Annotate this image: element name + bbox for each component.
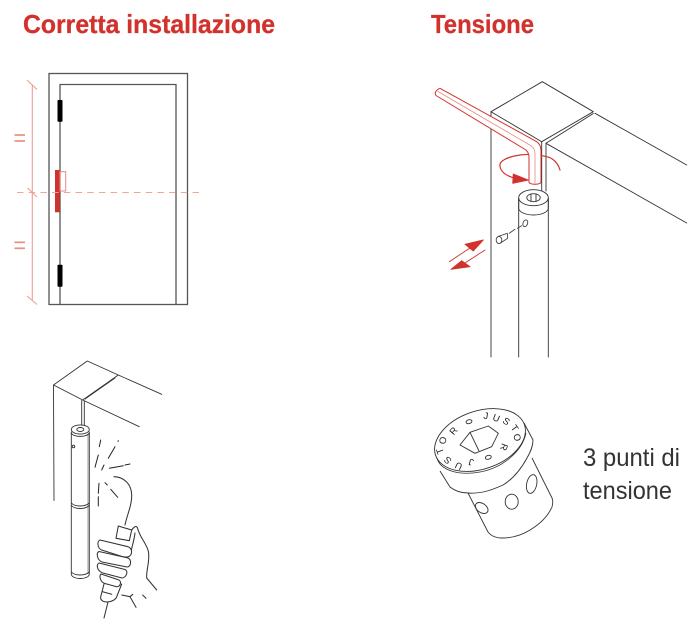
hex socket [460, 426, 498, 453]
lettering on cap: T [434, 446, 447, 455]
lettering on cap: R [497, 442, 510, 452]
red rotation arrow [500, 155, 560, 183]
diagram: hand tapping hinge with mallet [54, 361, 162, 618]
red hex key [435, 88, 541, 184]
lettering on cap: U [491, 412, 501, 425]
cap top face [426, 397, 534, 483]
red double arrows [449, 240, 485, 269]
icon: red central hinge [55, 170, 66, 212]
hinge cylinder [71, 425, 89, 578]
small holes [466, 419, 472, 424]
lettering on cap: O [437, 436, 450, 445]
text: 3 punti di tensione: 3 punti di [583, 444, 680, 472]
tension holes [473, 500, 490, 516]
door frame [49, 74, 188, 304]
door frame top [491, 82, 687, 357]
diagram: tension cap with JUSTOR lettering [426, 397, 553, 538]
title: Tensione: Tensione [431, 9, 534, 39]
lettering on cap: O [510, 433, 523, 442]
dashed centre line [17, 192, 201, 194]
hand holding mallet [97, 477, 157, 618]
lettering on cap: R [448, 425, 461, 438]
lettering on cap: T [508, 423, 520, 434]
icon: top hinge [58, 100, 62, 122]
dimension line with ticks [27, 80, 37, 304]
equal sign upper [14, 135, 25, 141]
lettering on cap: U [453, 459, 464, 472]
screw with dash line [496, 219, 529, 244]
title: Corretta installazione: Corretta installazione [23, 9, 275, 39]
diagram: tension adjustment with hex key [435, 82, 687, 357]
icon: bottom hinge [58, 265, 62, 287]
equal sign lower [14, 242, 25, 248]
door frame corner [54, 361, 162, 500]
lettering on cap [434, 411, 523, 472]
lettering on cap: J [467, 455, 475, 467]
lettering on cap: S [500, 416, 512, 428]
lettering on cap: J [483, 411, 489, 422]
lettering on cap: S [442, 454, 454, 466]
text: 3 punti di tensione [583, 444, 680, 505]
impact spark lines [95, 440, 130, 506]
text: 3 punti di tensione: tensione [583, 477, 672, 505]
cap stem [468, 458, 553, 538]
diagram: door with centred hinge placement [14, 74, 201, 304]
hinge cylinder [519, 190, 548, 357]
cap head [440, 423, 533, 493]
